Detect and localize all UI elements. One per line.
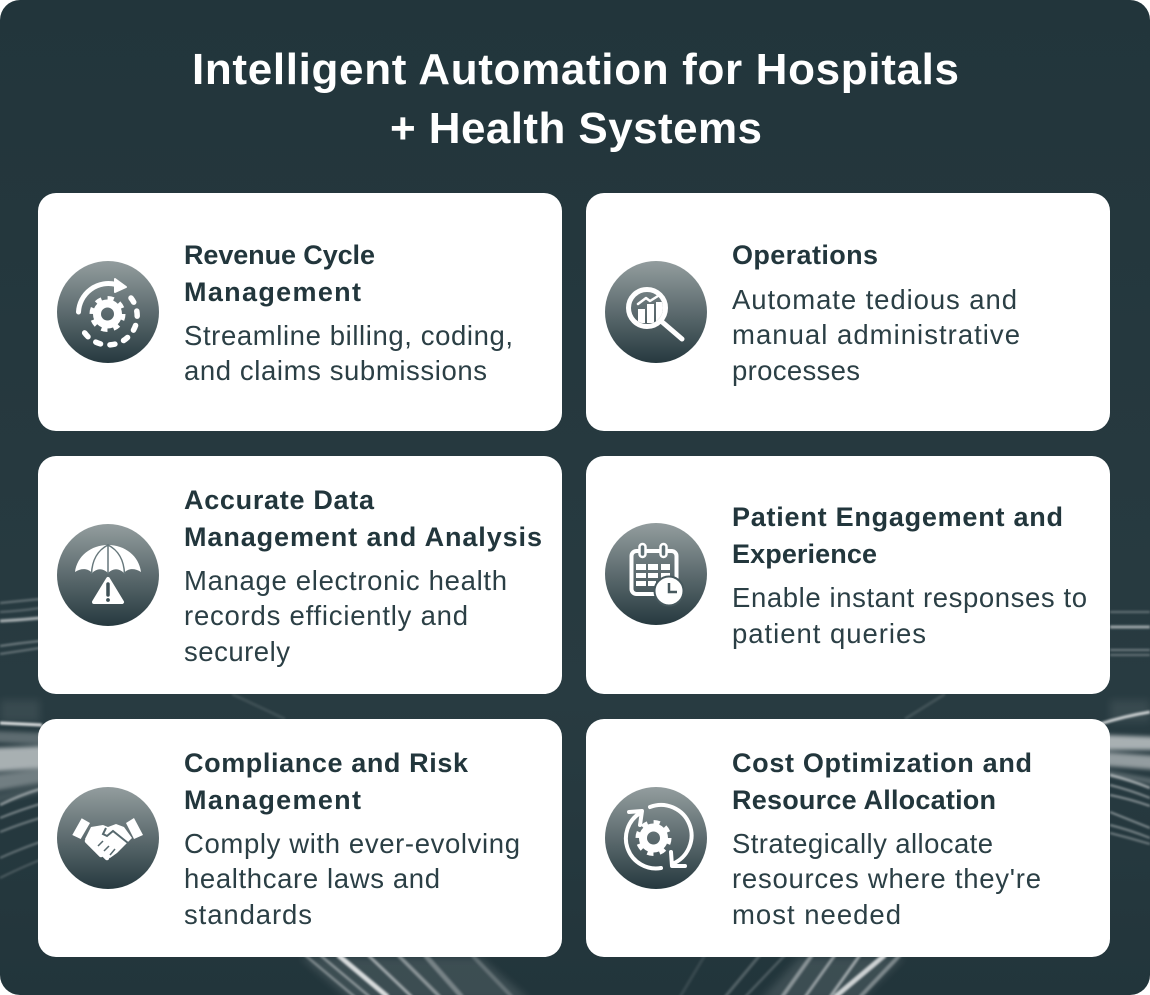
card heading <box>732 502 1063 569</box>
panel: operations <box>586 193 1110 431</box>
title: + Health Systems <box>390 104 762 153</box>
panel: revenue cycle management <box>38 193 562 431</box>
title <box>192 45 959 153</box>
card text: Enable instant responses to <box>732 582 1087 613</box>
card heading: Experience <box>732 539 877 569</box>
card heading: Resource Allocation <box>732 785 996 815</box>
panel: cost optimization <box>586 719 1110 957</box>
card text: manual administrative <box>732 319 1020 350</box>
card heading: Revenue Cycle <box>184 240 375 270</box>
card text: Automate tedious and <box>732 284 1017 315</box>
card text: processes <box>732 355 860 386</box>
card text: Manage electronic health <box>184 565 507 596</box>
icon: gear with circular arrow <box>57 261 159 363</box>
card text <box>184 828 520 930</box>
title: Intelligent Automation for Hospitals <box>192 45 959 94</box>
card text <box>732 582 1087 649</box>
icon: umbrella with warning sign <box>57 524 159 626</box>
card text: resources where they're <box>732 863 1041 894</box>
card text <box>184 565 507 667</box>
icon: magnifier with chart <box>605 261 707 363</box>
card heading <box>184 240 375 307</box>
icon: gear with cycle arrows <box>605 787 707 889</box>
icon: handshake <box>57 787 159 889</box>
panel: compliance and risk <box>38 719 562 957</box>
card text: Streamline billing, coding, <box>184 320 513 351</box>
card heading: Management and Analysis <box>184 522 542 552</box>
card text: patient queries <box>732 618 926 649</box>
card text: Strategically allocate <box>732 828 993 859</box>
card text: Comply with ever-evolving <box>184 828 520 859</box>
panel: accurate data management <box>38 456 562 694</box>
card heading <box>184 748 469 815</box>
card heading: Management <box>184 277 361 307</box>
card heading: Accurate Data <box>184 485 375 515</box>
card text: records efficiently and <box>184 600 468 631</box>
card text <box>184 320 513 386</box>
card text: standards <box>184 899 312 930</box>
card heading: Management <box>184 785 361 815</box>
card text: securely <box>184 636 290 667</box>
card text: healthcare laws and <box>184 863 440 894</box>
card text <box>732 828 1041 930</box>
card text <box>732 284 1020 386</box>
card heading: Operations <box>732 240 878 270</box>
card heading: Patient Engagement and <box>732 502 1063 532</box>
icon: calendar with clock <box>605 523 707 625</box>
card heading <box>184 485 542 552</box>
card heading: Compliance and Risk <box>184 748 469 778</box>
card heading <box>732 748 1032 815</box>
panel: patient engagement <box>586 456 1110 694</box>
card text: and claims submissions <box>184 355 487 386</box>
card heading: Cost Optimization and <box>732 748 1032 778</box>
card text: most needed <box>732 899 901 930</box>
